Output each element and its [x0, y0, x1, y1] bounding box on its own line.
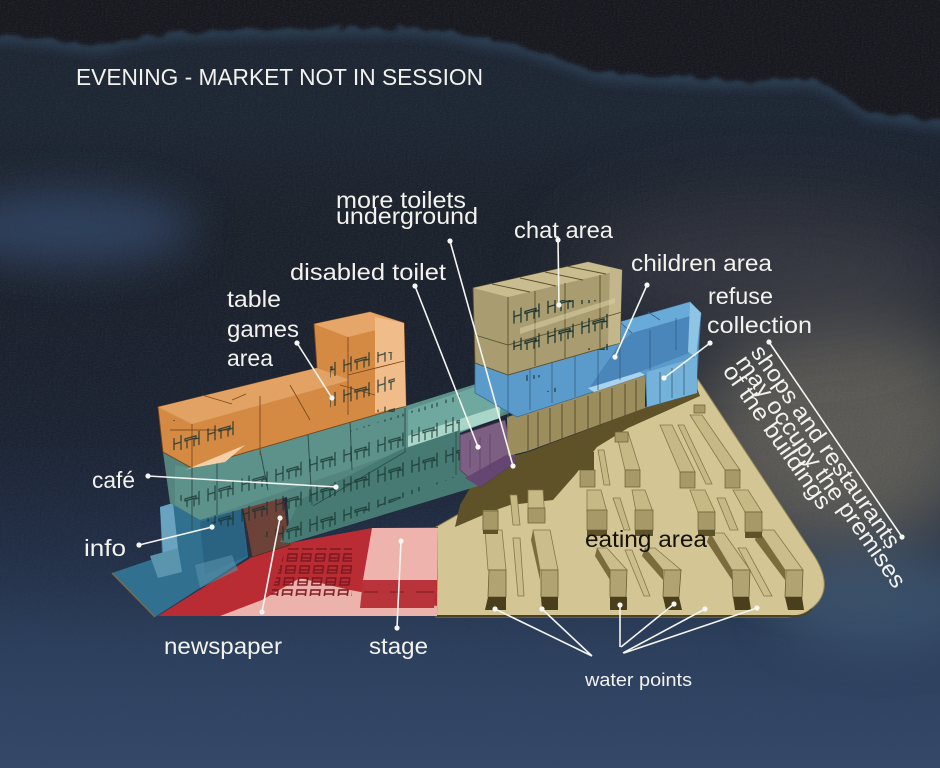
label: newspaper: newspaper — [164, 633, 282, 659]
leader: cafe — [148, 476, 336, 487]
leader lines — [139, 240, 902, 656]
label: refuse collection — [707, 283, 812, 338]
leader: refuse collection — [664, 343, 710, 378]
leader: info — [139, 527, 212, 545]
ground plate: eating area floor — [436, 378, 824, 617]
benches and water points — [483, 405, 804, 610]
label: cafe: café — [92, 467, 135, 493]
label: refuse collection: collection — [707, 312, 812, 338]
leader: disabled toilet — [415, 286, 478, 447]
building shadow on ground — [455, 388, 700, 527]
title: EVENING - MARKET NOT IN SESSION — [76, 64, 483, 90]
label: refuse collection: refuse — [708, 283, 773, 309]
leader: shops and restaurants — [769, 342, 902, 537]
label: stage: stage — [369, 633, 428, 659]
label: more toilets underground: underground — [336, 203, 478, 229]
label: shops and restaurants note: shops and restaurants — [746, 340, 906, 553]
label: info: info — [84, 535, 126, 561]
label: eating area: eating area — [585, 526, 707, 552]
panel: cafe building — [163, 372, 512, 543]
label: more toilets underground — [336, 187, 478, 229]
panel: ground floor shop fronts — [507, 375, 645, 456]
leader: children area — [615, 285, 647, 357]
panel: disabled toilet — [460, 420, 515, 487]
panel: newspaper room — [243, 497, 290, 557]
water point blocks — [488, 570, 803, 597]
middle row of benches — [483, 490, 762, 530]
leader: newspaper — [262, 518, 280, 612]
leader: more toilets — [450, 241, 513, 466]
dark wash above edge — [0, 0, 940, 123]
leader: stage — [397, 541, 401, 628]
bench side shadows — [531, 530, 785, 580]
label: more toilets underground: more toilets — [336, 187, 466, 213]
leader: table games — [297, 343, 332, 398]
panel: children area — [475, 302, 701, 418]
leader end dots — [136, 237, 905, 631]
leaders: water points — [495, 604, 757, 656]
label: children area: children area — [631, 250, 772, 276]
label: chat area: chat area — [514, 217, 613, 243]
bottom row of benches — [485, 530, 803, 596]
panel: chat area — [473, 262, 622, 375]
label: table games area: area — [227, 345, 273, 371]
label: disabled toilet: disabled toilet — [290, 259, 447, 285]
label: shops and restaurants note: of the buildings — [718, 359, 837, 514]
label: table games area: games — [227, 316, 299, 342]
soft wash rim — [0, 0, 940, 130]
upper row of benches — [598, 415, 740, 485]
label: shops and restaurants note: may occupy the premises — [731, 350, 912, 593]
label: water points: water points — [584, 670, 692, 690]
panel: table games area — [158, 312, 406, 470]
stage platform — [360, 528, 438, 608]
panel: info kiosk — [112, 503, 248, 617]
label: table games area: table — [227, 286, 281, 312]
panel: red seating area — [158, 527, 438, 616]
label: table games area — [227, 286, 299, 371]
leader: chat area — [558, 240, 559, 305]
